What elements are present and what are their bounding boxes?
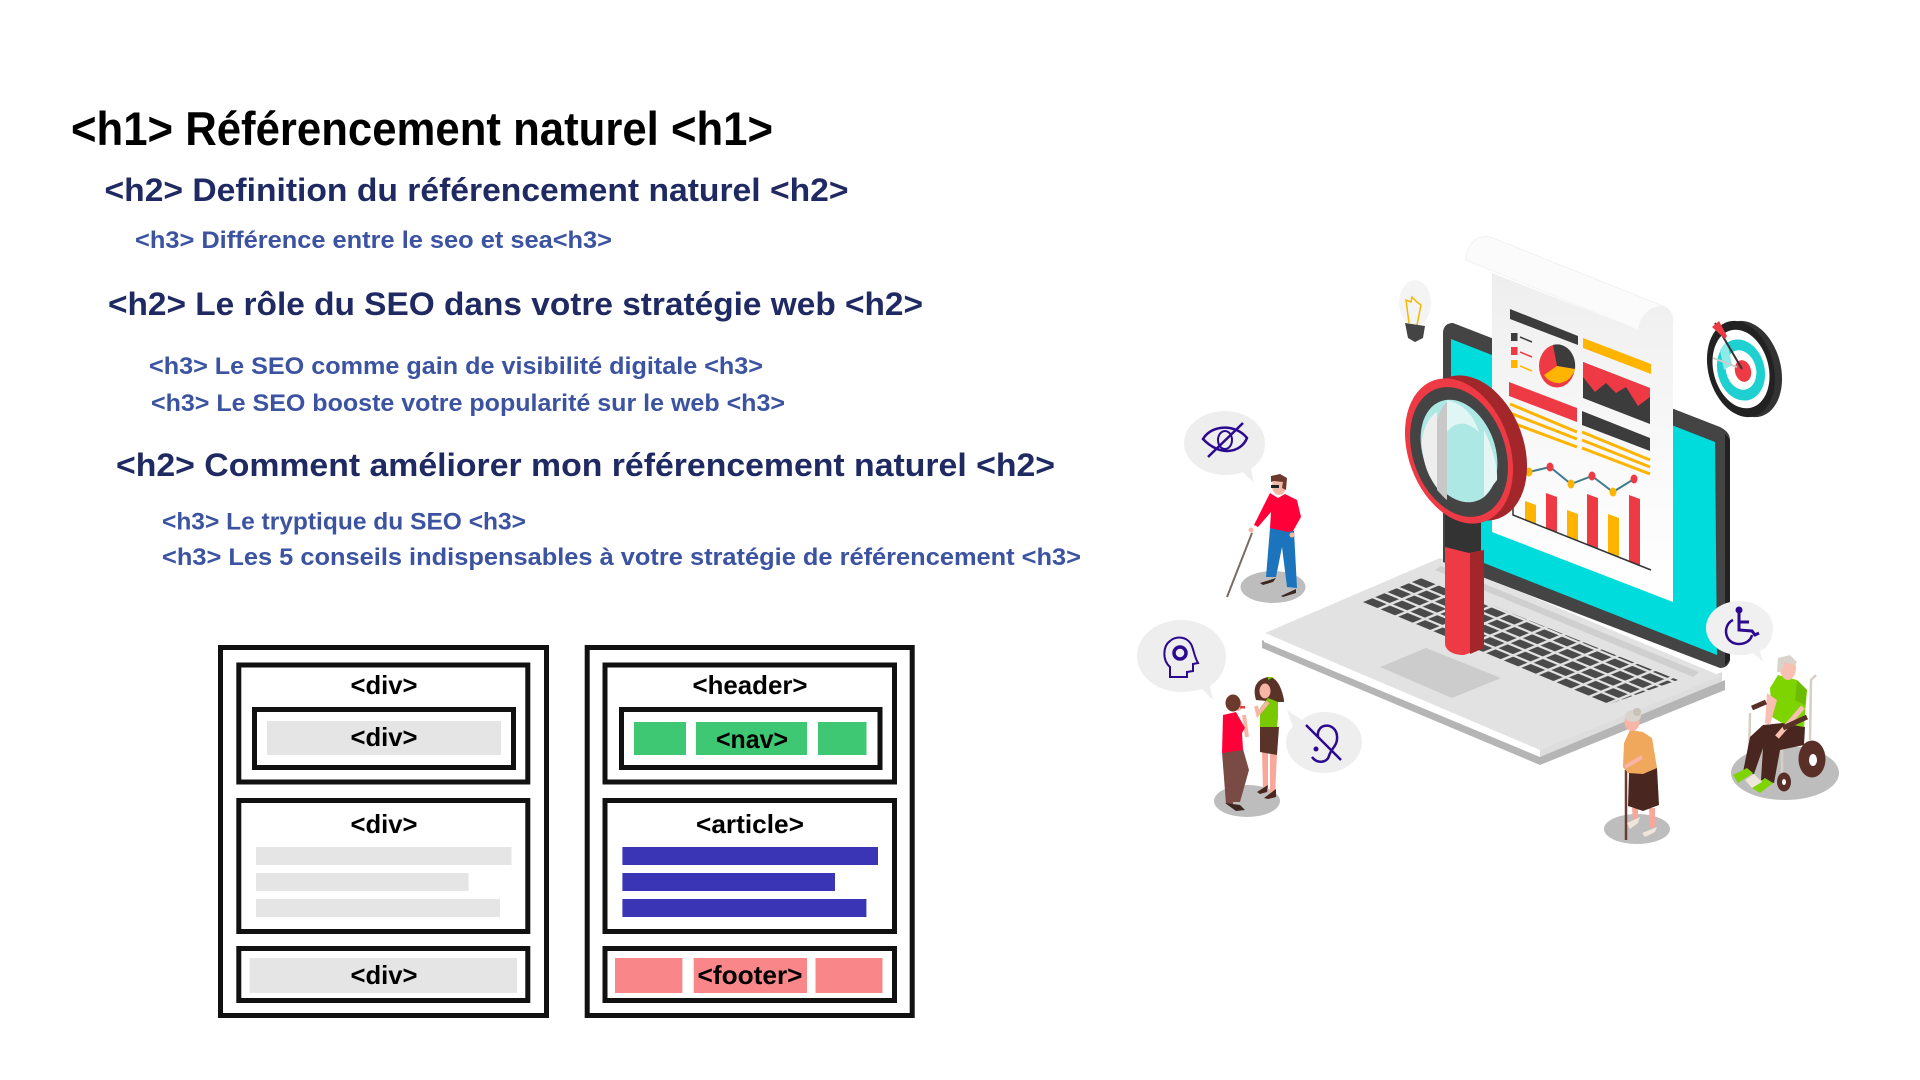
div block with text lines xyxy=(239,800,528,932)
heading h3: five tips: <h3> Les 5 conseils indispensables à votre stratégie de référencement <h3> xyxy=(162,544,1081,571)
heading h2: how to improve: <h2> Comment améliorer mon référencement naturel <h2> xyxy=(116,447,1055,483)
report dark band and lines xyxy=(1582,411,1650,474)
speech bubble: eye icon xyxy=(1184,411,1265,483)
div block with nested div: <div> xyxy=(350,670,418,700)
title h1: <h1> Référencement naturel <h1> xyxy=(71,102,773,155)
div footer block xyxy=(239,948,528,1000)
div block with nested div: <div> xyxy=(350,722,418,752)
report legend xyxy=(1511,333,1532,371)
person: blind man with cane xyxy=(1227,474,1306,603)
header block with nav: <header> xyxy=(692,670,808,700)
icon: target with arrow xyxy=(1697,313,1792,425)
heading h3: visibility: <h3> Le SEO comme gain de visibilité digitale <h3> xyxy=(149,353,763,380)
bar chart xyxy=(1513,493,1651,570)
person: old woman with cane xyxy=(1604,708,1670,844)
div footer block: <div> xyxy=(350,960,418,990)
heading h2: role of SEO: <h2> Le rôle du SEO dans votre stratégie web <h2> xyxy=(108,286,923,322)
keyboard xyxy=(1360,577,1678,705)
heading h3: tryptique: <h3> Le tryptique du SEO <h3> xyxy=(162,508,526,536)
report header band xyxy=(1510,309,1578,345)
line chart xyxy=(1526,462,1638,496)
header block with nav xyxy=(605,665,894,782)
article block with text lines xyxy=(605,800,894,932)
speech bubble: wheelchair icon xyxy=(1706,601,1773,662)
touchpad xyxy=(1380,648,1501,698)
div block with nested div xyxy=(239,665,528,782)
speech bubble: mind icon xyxy=(1137,620,1226,700)
people: couple talking xyxy=(1214,677,1284,817)
panel: div-only wireframe xyxy=(220,648,546,1016)
report red band and lines xyxy=(1509,382,1577,447)
pie chart xyxy=(1539,344,1575,388)
footer block: <footer> xyxy=(698,960,802,990)
area chart xyxy=(1583,362,1650,424)
article block with text lines: <article> xyxy=(696,809,804,839)
heading h3: popularity: <h3> Le SEO booste votre popularité sur le web <h3> xyxy=(151,390,785,417)
magnifying glass xyxy=(1386,360,1546,655)
heading h3: seo vs sea: <h3> Différence entre le seo et sea<h3> xyxy=(135,227,612,254)
outline of headings xyxy=(71,102,1081,571)
laptop screen xyxy=(1443,323,1730,668)
laptop base xyxy=(1262,558,1725,765)
header block with nav: <nav> xyxy=(716,724,788,754)
div block with text lines: <div> xyxy=(350,809,418,839)
speech bubble: deaf ear icon xyxy=(1286,710,1362,773)
person: man in wheelchair xyxy=(1731,655,1839,800)
illustration: accessibility and SEO laptop scene xyxy=(1137,237,1839,844)
icon: light bulb xyxy=(1399,280,1431,342)
footer block xyxy=(605,948,894,1000)
report yellow band xyxy=(1583,338,1651,374)
report sheet xyxy=(1466,237,1673,602)
panel: semantic wireframe xyxy=(587,648,912,1016)
heading h2: definition: <h2> Definition du référencement naturel <h2> xyxy=(104,172,848,208)
